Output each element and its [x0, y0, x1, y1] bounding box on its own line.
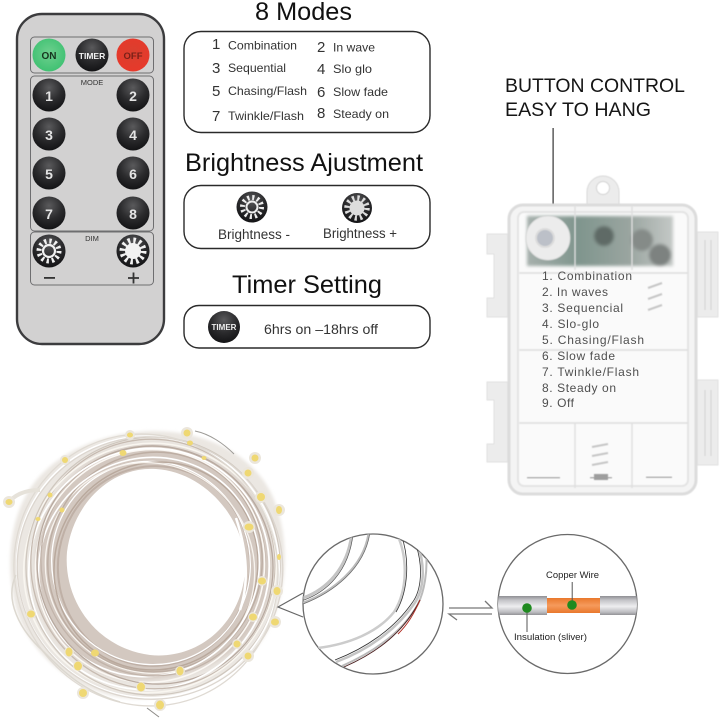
mode list on case: 4. Slo-glo: [542, 317, 599, 331]
wire cross-section: [498, 596, 638, 615]
button: 1: 1: [45, 88, 53, 104]
button: 4: 4: [129, 127, 137, 143]
button: 2: [116, 78, 150, 112]
mode list on case: 7. Twinkle/Flash: [542, 365, 639, 379]
button: 5: [32, 156, 66, 190]
zoom pointer: [278, 593, 303, 617]
mode label: MODE: [81, 78, 103, 87]
mode 1: Combination: [228, 38, 297, 52]
mode 7: [212, 108, 304, 125]
button: 2: 2: [129, 88, 137, 104]
button: timer: TIMER: [79, 51, 105, 61]
side clips: [487, 232, 718, 465]
button: 8: 8: [129, 206, 137, 222]
mode 8: [317, 105, 389, 122]
case body: [509, 205, 696, 494]
icon: timer button: [208, 311, 240, 343]
plus sign: [128, 272, 139, 284]
mode 6: Slow fade: [333, 85, 388, 99]
mode 7: 7: [212, 108, 220, 125]
minus sign: [44, 277, 55, 279]
timer text: 6hrs on –18hrs off: [264, 321, 378, 337]
mode 8: Steady on: [333, 107, 389, 121]
button: 7: [32, 196, 66, 230]
mode 2: 2: [317, 39, 325, 56]
copper wire marker: Copper Wire: [546, 570, 599, 581]
mode list on case: 6. Slow fade: [542, 349, 615, 363]
mode 1: [212, 36, 297, 53]
mode 8: 8: [317, 105, 325, 122]
mode 3: 3: [212, 60, 220, 77]
mode 5: [212, 83, 307, 100]
button: dim minus: [32, 234, 66, 268]
LED bulbs: [3, 427, 285, 711]
mode list on case: 1. Combination: [542, 269, 632, 283]
dim button group: [30, 232, 154, 285]
magnified wires: [303, 532, 427, 667]
contact strip: [527, 477, 672, 478]
button: 3: 3: [45, 127, 53, 143]
mode 2: In wave: [333, 40, 375, 54]
insulation marker: Insulation (sliver): [514, 632, 587, 643]
panel: brightness: [184, 186, 430, 248]
mode 4: 4: [317, 61, 325, 78]
mode 7: Twinkle/Flash: [228, 109, 304, 123]
button: 5: 5: [45, 166, 53, 182]
remote body: [17, 14, 164, 344]
mode list on case: 5. Chasing/Flash: [542, 333, 644, 347]
mode list on case: [542, 269, 644, 410]
mode 6: [317, 84, 388, 101]
callout: button control: EASY TO HANG: [505, 99, 651, 121]
button: 8: [116, 196, 150, 230]
battery box: [487, 176, 718, 494]
button: on: ON: [42, 51, 56, 62]
icon: brightness plus: [342, 193, 372, 223]
button: 7: 7: [45, 206, 53, 222]
button: 6: 6: [129, 166, 137, 182]
mode list on case: 9. Off: [542, 396, 575, 410]
mode list on case: 3. Sequencial: [542, 301, 623, 315]
mode 5: 5: [212, 83, 220, 100]
button: 6: [116, 156, 150, 190]
case dividers: [519, 206, 688, 488]
coil centre opening: [67, 469, 245, 655]
callout: button control: BUTTON CONTROL: [505, 75, 685, 97]
callout: button control: [505, 75, 685, 121]
mode list on case: 8. Steady on: [542, 381, 616, 395]
mode 5: Chasing/Flash: [228, 84, 307, 98]
mode 2: [317, 39, 375, 56]
wire structure diagram: [498, 534, 638, 674]
double arrow: [449, 601, 492, 620]
icon: timer button: TIMER: [212, 323, 237, 332]
label: brightness minus: Brightness -: [218, 227, 290, 242]
mode 3: Sequential: [228, 61, 286, 75]
remote control: [17, 14, 164, 344]
stray wires: [6, 431, 246, 717]
hanging hook: [587, 176, 619, 205]
button: off: OFF: [124, 51, 143, 62]
mode list on case: 2. In waves: [542, 285, 608, 299]
panel: timer: [184, 306, 430, 348]
icon: brightness minus: [236, 192, 268, 222]
button: 4: [116, 118, 150, 150]
button: 1: [32, 78, 66, 112]
button: 3: [32, 118, 66, 150]
dim label: DIM: [85, 234, 99, 243]
mode 4: [317, 61, 372, 78]
label: brightness plus: Brightness +: [323, 226, 397, 241]
springs: [592, 283, 662, 465]
mode 4: Slo glo: [333, 62, 372, 76]
button: dim plus: [116, 234, 150, 268]
power and timer button group: [30, 37, 154, 73]
magnified wire circle: [303, 532, 443, 674]
string lights coil: [0, 383, 333, 720]
coil wires: [0, 383, 333, 720]
heading: timer setting: Timer Setting: [232, 271, 382, 299]
mode 1: 1: [212, 36, 220, 53]
push button: [526, 216, 570, 260]
panel: modes list: [184, 32, 430, 132]
mode button group: [30, 76, 154, 231]
mode 6: 6: [317, 84, 325, 101]
heading: brightness adjustment: Brightness Ajustment: [185, 149, 423, 177]
coil body: [0, 383, 333, 720]
circuit board: [527, 216, 673, 266]
mode 3: [212, 60, 286, 77]
callout line: [552, 128, 554, 208]
